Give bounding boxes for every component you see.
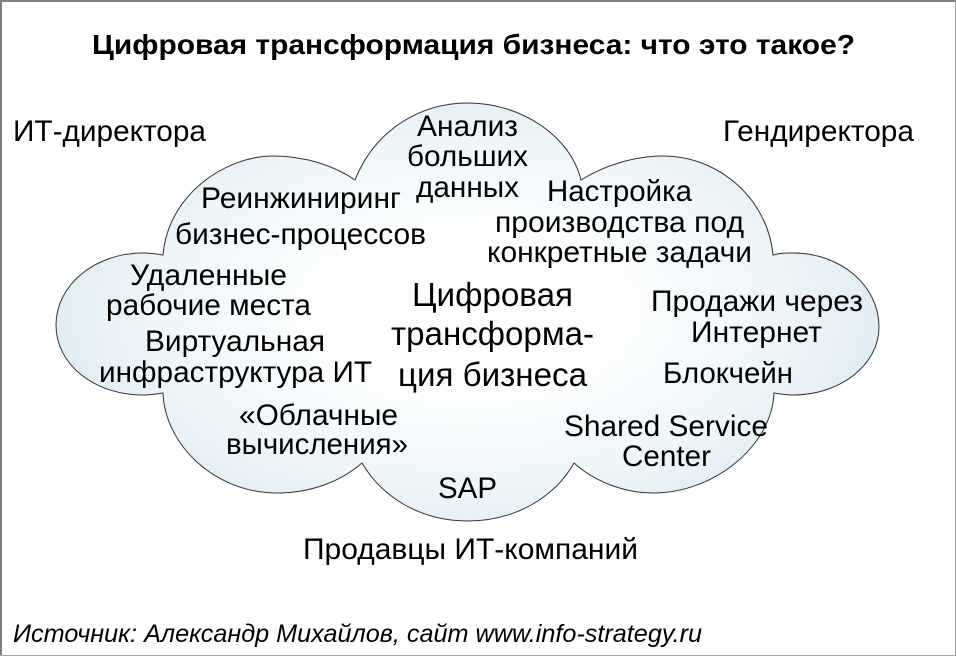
text: business process reengineering: бизнес-процессов [175, 218, 426, 251]
text: remote workplaces [106, 259, 312, 322]
text: internet sales: Продажи через [651, 285, 863, 318]
text: production tuning: Настройка [547, 175, 693, 208]
text: business process reengineering: Реинжиниринг [201, 182, 401, 215]
text: SAP: SAP [438, 472, 497, 505]
panel: cloud [56, 103, 879, 521]
text: cloud computing: вычисления» [226, 428, 408, 461]
text: shared service center [564, 410, 768, 473]
text: remote workplaces: рабочие места [106, 289, 312, 322]
text: cloud computing [226, 399, 408, 461]
source line: Источник: Александр Михайлов, сайт www.info-strategy.ru [13, 620, 702, 648]
cloud shape [56, 103, 879, 521]
text: central topic: ция бизнеса [398, 356, 588, 393]
text: shared service center: Center [622, 440, 711, 473]
text: virtual IT infrastructure: инфраструктура ИТ [99, 356, 372, 389]
text: virtual IT infrastructure: Виртуальная [145, 325, 325, 358]
text: blockchain: Блокчейн [663, 357, 793, 390]
text: internet sales: Интернет [691, 316, 822, 349]
text: remote workplaces: Удаленные [130, 259, 287, 292]
text: cloud computing: «Облачные [239, 399, 398, 432]
text: big data analysis: данных [416, 171, 519, 204]
text: central topic [391, 276, 594, 393]
text: central topic: трансформа- [391, 315, 594, 352]
text: shared service center: Shared Service [564, 410, 768, 443]
label: CEOs: Гендиректора [723, 115, 915, 148]
text: production tuning: производства под [495, 206, 744, 239]
label: IT vendors: Продавцы ИТ-компаний [303, 533, 638, 566]
text: big data analysis: больших [407, 140, 528, 173]
text: internet sales [651, 285, 863, 349]
text: central topic: Цифровая [412, 276, 573, 313]
text: virtual IT infrastructure [99, 325, 372, 389]
label: IT directors: ИТ-директора [13, 115, 207, 148]
text: business process reengineering [175, 182, 426, 251]
text: production tuning [487, 175, 752, 269]
text: big data analysis: Анализ [417, 110, 518, 143]
title: Цифровая трансформация бизнеса: что это такое? [92, 29, 855, 60]
text: big data analysis [407, 110, 528, 204]
text: production tuning: конкретные задачи [487, 236, 752, 269]
